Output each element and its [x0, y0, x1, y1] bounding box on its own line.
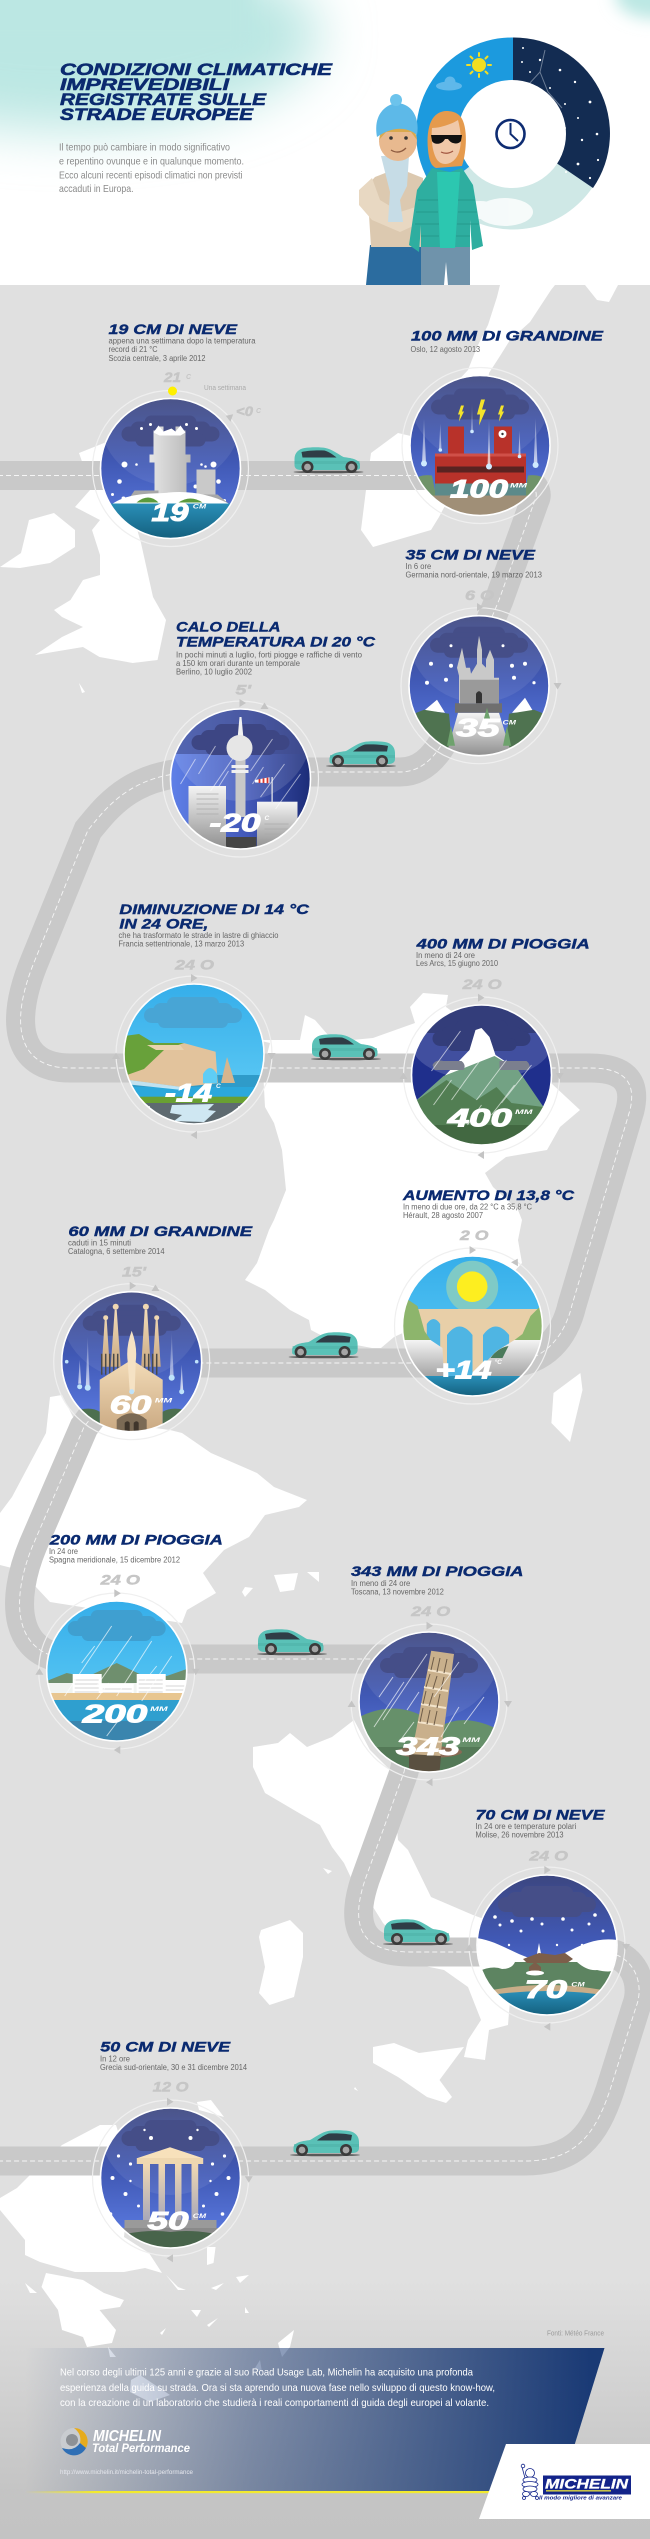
scene: leaning tower of Pisa: MM [462, 1737, 481, 1744]
scene: cliffs and icy road: C [216, 1083, 221, 1090]
map of Europe [0, 285, 618, 2402]
icon: Bibendum [521, 2464, 538, 2500]
scene: aqueduct under the sun: °C [494, 1358, 502, 1366]
title: IMPREVEDIBILI [60, 75, 231, 94]
heading: 35 CM DI NEVE [406, 548, 536, 562]
arrows [465, 1866, 630, 2031]
panel: 200 mm di pioggia, Spagna [35, 1532, 223, 1754]
time labels: 21 [163, 370, 181, 385]
arrows [166, 2098, 253, 2262]
panel: 35 cm di neve, Germania [401, 548, 562, 764]
arrows [35, 1589, 200, 1754]
icon: cloud in rain sector [462, 198, 533, 226]
description: In 24 ore e temperature polari [476, 1822, 576, 1831]
description: Molise, 26 novembre 2013 [476, 1830, 564, 1840]
description: Catalogna, 6 settembre 2014 [68, 1247, 165, 1256]
description [416, 951, 498, 968]
icon: stars and lightning [521, 47, 599, 179]
heading: 400 MM DI PIOGGIA [415, 936, 590, 951]
scene: rainy mountain: MM [515, 1109, 533, 1116]
scene: snow-covered village: CM [571, 1982, 585, 1989]
heading: 19 CM DI NEVE [108, 322, 238, 337]
car 6 [383, 1919, 453, 1945]
panel: calo della temperatura, Berlino [162, 620, 376, 857]
scene: coastal town in rain: MM [150, 1706, 169, 1713]
time label: 24 O [461, 977, 502, 992]
time label: 6 O [465, 588, 495, 603]
panel: 100 mm di grandine, Oslo [402, 318, 604, 524]
scene: aqueduct under the sun: +14 [436, 1356, 492, 1384]
intro text: Ecco alcuni recenti episodi climatici non previsti [59, 170, 242, 182]
description [403, 1202, 532, 1220]
time label: 2 O [459, 1228, 489, 1243]
panel: diminuzione di 14 gradi, Francia [112, 902, 310, 1139]
description: a 150 km orari durante un temporale [176, 659, 301, 668]
description: Berlino, 10 luglio 2002 [176, 668, 253, 676]
scene: snow-covered village: 70 [524, 1976, 567, 2004]
description: caduti in 15 minuti [68, 1238, 131, 1248]
panel: 400 mm di pioggia, Les Arcs [399, 936, 590, 1159]
description [49, 1547, 181, 1564]
description: record di 21 °C [108, 345, 158, 354]
description: Toscana, 13 novembre 2012 [351, 1588, 444, 1596]
car 4 [289, 1332, 359, 1358]
source note: Fonti: Météo France [547, 2330, 604, 2338]
scene: rainy mountain [404, 997, 560, 1153]
time label: 15' [122, 1265, 147, 1280]
panel: 343 mm di pioggia, Toscana [348, 1564, 524, 1786]
description [406, 562, 542, 580]
logo wordmark [539, 2476, 631, 2502]
logo: Michelin Total Performance: MICHELIN [93, 2428, 162, 2445]
description [476, 1822, 576, 1840]
heading: 200 MM DI PIOGGIA [48, 1532, 223, 1547]
description: Germania nord-orientale, 19 marzo 2013 [406, 570, 542, 580]
scene: aqueduct under the sun [394, 1248, 550, 1404]
clock dial: day and night ring [416, 37, 610, 229]
description: Scozia centrale, 3 aprile 2012 [108, 354, 206, 363]
description [176, 650, 363, 676]
scene: Sagrada Familia in hail: 60 [110, 1391, 151, 1419]
time label: 12 O [153, 2080, 189, 2095]
scene: castle in snow: CM [193, 504, 207, 510]
scene: Greek temple in snow: CM [193, 2213, 207, 2220]
heading: 50 CM DI NEVE [100, 2040, 231, 2055]
arrows [477, 603, 562, 690]
heading [119, 902, 310, 932]
intro text: accaduti in Europa. [59, 183, 134, 195]
time label: 24 O [528, 1849, 569, 1864]
scene: Greek temple in snow [92, 2100, 249, 2256]
description: In 6 ore [406, 562, 432, 571]
description [108, 336, 256, 363]
heading: IN 24 ORE, [119, 917, 208, 932]
scene: TV tower in rainstorm: -20 [210, 810, 261, 838]
scene: leaning tower of Pisa [350, 1624, 508, 1780]
time labels: C [256, 408, 262, 415]
description: In pochi minuti a luglio, forti piogge e raffiche di vento [176, 650, 363, 660]
arrows [240, 699, 268, 709]
time label: 24 O [174, 958, 215, 972]
description: Oslo, 12 agosto 2013 [410, 345, 481, 354]
heading: DIMINUZIONE DI 14 °C [119, 902, 310, 917]
yellow rule [25, 2491, 495, 2493]
description: In meno di 24 ore [351, 1579, 411, 1588]
description: Les Arcs, 15 giugno 2010 [416, 959, 498, 968]
scene: cliffs and icy road [116, 976, 272, 1132]
scene: TV tower in rainstorm [162, 700, 319, 858]
description: che ha trasformato le strade in lastre di ghiaccio [118, 931, 279, 940]
description: Grecia sud-orientale, 30 e 31 dicembre 2014 [100, 2063, 248, 2072]
description [100, 2054, 248, 2072]
description: Spagna meridionale, 15 dicembre 2012 [49, 1556, 181, 1564]
car 1 [294, 447, 364, 473]
icon: yellow sun dot [168, 386, 177, 396]
car 2 [326, 741, 396, 767]
car 5 [257, 1629, 327, 1655]
scene: town hall in hail: 100 [450, 475, 508, 503]
scene: snow-covered village [469, 1867, 625, 2023]
time labels: Una settimana [204, 385, 246, 392]
panel: 50 cm di neve, Grecia [92, 2040, 253, 2262]
heading: TEMPERATURA DI 20 °C [176, 635, 376, 650]
illustration: man with hat and scarf [359, 94, 423, 285]
intro text [59, 142, 244, 195]
scene: town hall in hail: MM [510, 482, 528, 490]
description: In 24 ore [49, 1547, 79, 1556]
time labels: <0 [236, 404, 254, 419]
intro text: Il tempo può cambiare in modo significativo [59, 142, 230, 154]
scene: Sagrada Familia in hail: MM [155, 1398, 173, 1405]
description [118, 931, 279, 948]
Michelin logo box [479, 2444, 650, 2519]
scene: leaning tower of Pisa: 343 [396, 1733, 460, 1761]
time labels: C [186, 374, 192, 381]
illustration: woman with sunglasses [409, 111, 483, 285]
heading: 100 MM DI GRANDINE [411, 329, 604, 344]
scene: town hall in hail [402, 367, 558, 524]
title [60, 60, 333, 124]
scene: rainy mountain: 400 [446, 1105, 512, 1133]
arrows [348, 1622, 512, 1786]
car 7 [290, 2130, 360, 2156]
banner text: esperienza della guida su strada. Ora si sta aprendo una nuova fase nello sviluppo di questo know-how, [60, 2382, 495, 2394]
description [351, 1579, 444, 1596]
scene: castle in snow [92, 390, 249, 547]
description: In meno di 24 ore [416, 951, 476, 960]
banner text: con la creazione di un laboratorio che studierà i reali comportamenti di guida degli europei al volante. [60, 2397, 489, 2409]
description: Francia settentrionale, 13 marzo 2013 [118, 940, 245, 948]
arrows [112, 974, 276, 1139]
time label: 24 O [410, 1604, 451, 1619]
scene: coastal town in rain: 200 [81, 1701, 147, 1729]
heading: 70 CM DI NEVE [476, 1807, 606, 1822]
scene: castle on a mountain: CM [502, 720, 517, 727]
logo: Michelin Total Performance [60, 2428, 190, 2455]
arrows [130, 1282, 160, 1291]
scene: Sagrada Familia in hail [53, 1283, 210, 1440]
heading [176, 620, 376, 650]
scene: Greek temple in snow: 50 [148, 2207, 189, 2235]
road [0, 476, 639, 2161]
scene: castle on a mountain [400, 607, 558, 764]
heading: 60 MM DI GRANDINE [68, 1224, 253, 1239]
description: appena una settimana dopo la temperatura [108, 336, 256, 346]
description: In 12 ore [100, 2054, 131, 2064]
arrows [470, 1246, 521, 1266]
scene: castle in snow: 19 [152, 499, 189, 527]
website address: http://www.michelin.it/michelin-total-performance [60, 2469, 193, 2476]
banner text [60, 2366, 495, 2409]
heading: 343 MM DI PIOGGIA [351, 1564, 524, 1579]
arrow [224, 412, 233, 422]
panel: 70 cm di neve, Molise [465, 1807, 630, 2031]
header background [0, 0, 650, 290]
time labels [163, 370, 262, 419]
icon: sun [467, 53, 491, 77]
description: Hérault, 28 agosto 2007 [403, 1211, 484, 1220]
logo wordmark: MICHELIN [545, 2476, 629, 2492]
arrows [399, 994, 564, 1159]
footer banner [25, 2348, 604, 2493]
heading: CALO DELLA [176, 620, 280, 635]
icon: clouds in day sector [436, 76, 470, 144]
scene: TV tower in rainstorm: C [264, 815, 270, 822]
scene: coastal town in rain [39, 1593, 195, 1749]
panel: 60 mm di grandine, Catalogna [54, 1224, 253, 1440]
banner text: Nel corso degli ultimi 125 anni e grazie al suo Road Usage Lab, Michelin ha acquisito una profonda [60, 2366, 473, 2378]
scene: castle on a mountain: 35 [456, 715, 501, 743]
scene: cliffs and icy road: -14 [165, 1080, 212, 1108]
intro text: e repentino ovunque e in qualunque momento. [59, 156, 244, 168]
panel: aumento di 13,8 gradi, Hérault [394, 1188, 575, 1404]
time label: 24 O [99, 1572, 141, 1587]
heading: AUMENTO DI 13,8 °C [402, 1188, 575, 1203]
description: In meno di due ore, da 22 °C a 35,8 °C [403, 1202, 532, 1212]
title: STRADE EUROPEE [60, 105, 254, 124]
car 3 [311, 1034, 381, 1060]
description [68, 1238, 165, 1256]
logo: Michelin Total Performance: Total Performance [92, 2441, 190, 2455]
title: REGISTRATE SULLE [60, 90, 267, 109]
logo wordmark: Il modo migliore di avanzare [539, 2496, 622, 2502]
icon: clock [496, 120, 524, 148]
panel: 19 cm di neve, Scozia [92, 322, 262, 546]
title: CONDIZIONI CLIMATICHE [60, 60, 333, 79]
time label: 5' [236, 682, 252, 698]
